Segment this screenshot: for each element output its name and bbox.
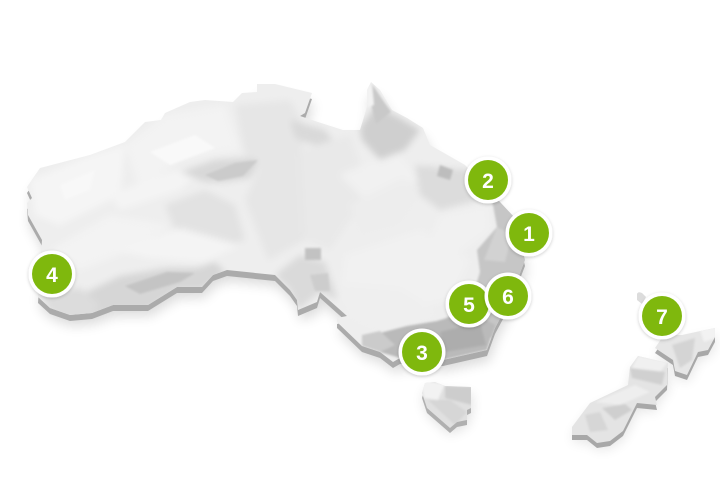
marker 5 bbox=[446, 280, 492, 328]
marker 2 bbox=[464, 156, 512, 204]
map: New Zealand north island bbox=[637, 292, 716, 382]
marker 6 bbox=[484, 272, 532, 320]
map: Australia bbox=[27, 82, 530, 373]
marker 4: 4 bbox=[46, 264, 58, 287]
northern tip bbox=[637, 292, 646, 304]
marker 2: 2 bbox=[482, 170, 494, 193]
marker 3: 3 bbox=[416, 342, 428, 365]
marker 1: 1 bbox=[523, 223, 535, 246]
marker 3 bbox=[398, 328, 446, 376]
marker 4 bbox=[28, 250, 76, 298]
marker 1 bbox=[506, 210, 552, 256]
map: Tasmania bbox=[420, 380, 472, 435]
marker 7 bbox=[638, 292, 686, 340]
map: New Zealand south island bbox=[572, 356, 669, 450]
marker 5: 5 bbox=[463, 294, 475, 317]
marker 6: 6 bbox=[502, 286, 514, 309]
marker 7: 7 bbox=[656, 306, 668, 329]
